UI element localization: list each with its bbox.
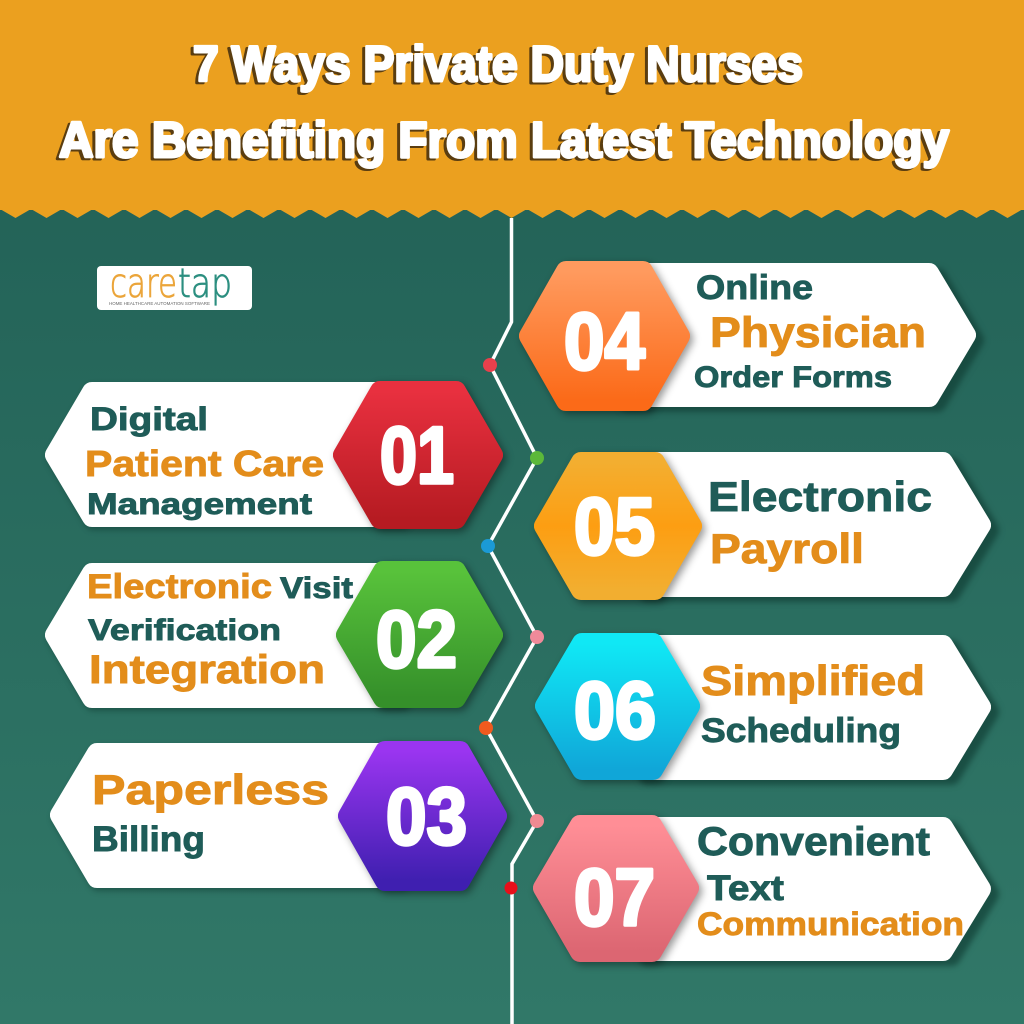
label 04: [694, 269, 926, 394]
hexagon 02: [346, 571, 493, 698]
hexagon 04: [529, 271, 680, 401]
label 04: Physician: [710, 309, 926, 357]
hexagon 05: 05: [574, 482, 655, 572]
label 01: Patient Care: [85, 443, 324, 484]
label 03: Billing: [92, 820, 205, 859]
label 07: Convenient: [697, 820, 930, 864]
label 07: Text: [707, 869, 784, 908]
item 04: Online Physician Order Forms: [529, 269, 966, 401]
label 03: Paperless: [92, 766, 329, 813]
hexagon 06: [545, 643, 690, 770]
connector dots: [479, 358, 544, 894]
header banner: [0, 0, 1024, 219]
label 06: Scheduling: [701, 712, 901, 750]
logo: caretap: [97, 261, 252, 310]
label 07: Communication: [697, 906, 964, 942]
label 02: Visit: [280, 572, 353, 605]
label 06: Simplified: [701, 657, 925, 704]
label 01: Management: [87, 488, 312, 521]
logo: caretap: tap: [178, 261, 232, 307]
hexagon 03: 03: [386, 772, 467, 862]
hexagon 01: 01: [380, 411, 454, 501]
label 05: Electronic: [708, 473, 932, 520]
label 07: [697, 820, 964, 942]
title: 7 Ways Private Duty Nurses: [193, 36, 803, 92]
label 01: [85, 401, 324, 521]
item 05: Electronic Payroll: [544, 462, 981, 590]
item 07: Convenient Text Communication: [543, 820, 981, 952]
hexagon 01: [343, 391, 493, 519]
title: [59, 36, 949, 168]
label 03: [92, 766, 329, 859]
logo: caretap: care: [110, 261, 177, 307]
item 03: Paperless Billing: [60, 751, 497, 881]
hexagon 06: 06: [574, 666, 656, 756]
item 06: Simplified Scheduling: [545, 643, 981, 770]
label 02: [87, 568, 353, 692]
label 01: Digital: [90, 401, 208, 437]
hexagon 05: [544, 462, 692, 590]
item 02: Electronic Visit Verification Integration: [55, 568, 493, 698]
label 02: Verification: [88, 614, 281, 647]
label 05: Payroll: [710, 525, 864, 572]
hexagon 02: 02: [376, 595, 457, 685]
label 02: Integration: [89, 648, 325, 692]
logo: caretap: HOME HEALTHCARE AUTOMATION SOFTWARE: [109, 301, 210, 306]
title: Are Benefiting From Latest Technology: [59, 112, 949, 168]
hexagon 07: 07: [574, 853, 655, 943]
label 05: [708, 473, 932, 572]
label 06: [701, 657, 925, 750]
item 01: Digital Patient Care Management: [55, 391, 493, 521]
hexagon 04: 04: [564, 297, 645, 387]
hexagon 03: [348, 751, 497, 881]
label 04: Online: [696, 269, 813, 307]
label 02: Electronic: [87, 568, 272, 606]
label 04: Order Forms: [694, 361, 892, 394]
central connector line: [486, 218, 537, 1024]
hexagon 07: [543, 825, 689, 952]
